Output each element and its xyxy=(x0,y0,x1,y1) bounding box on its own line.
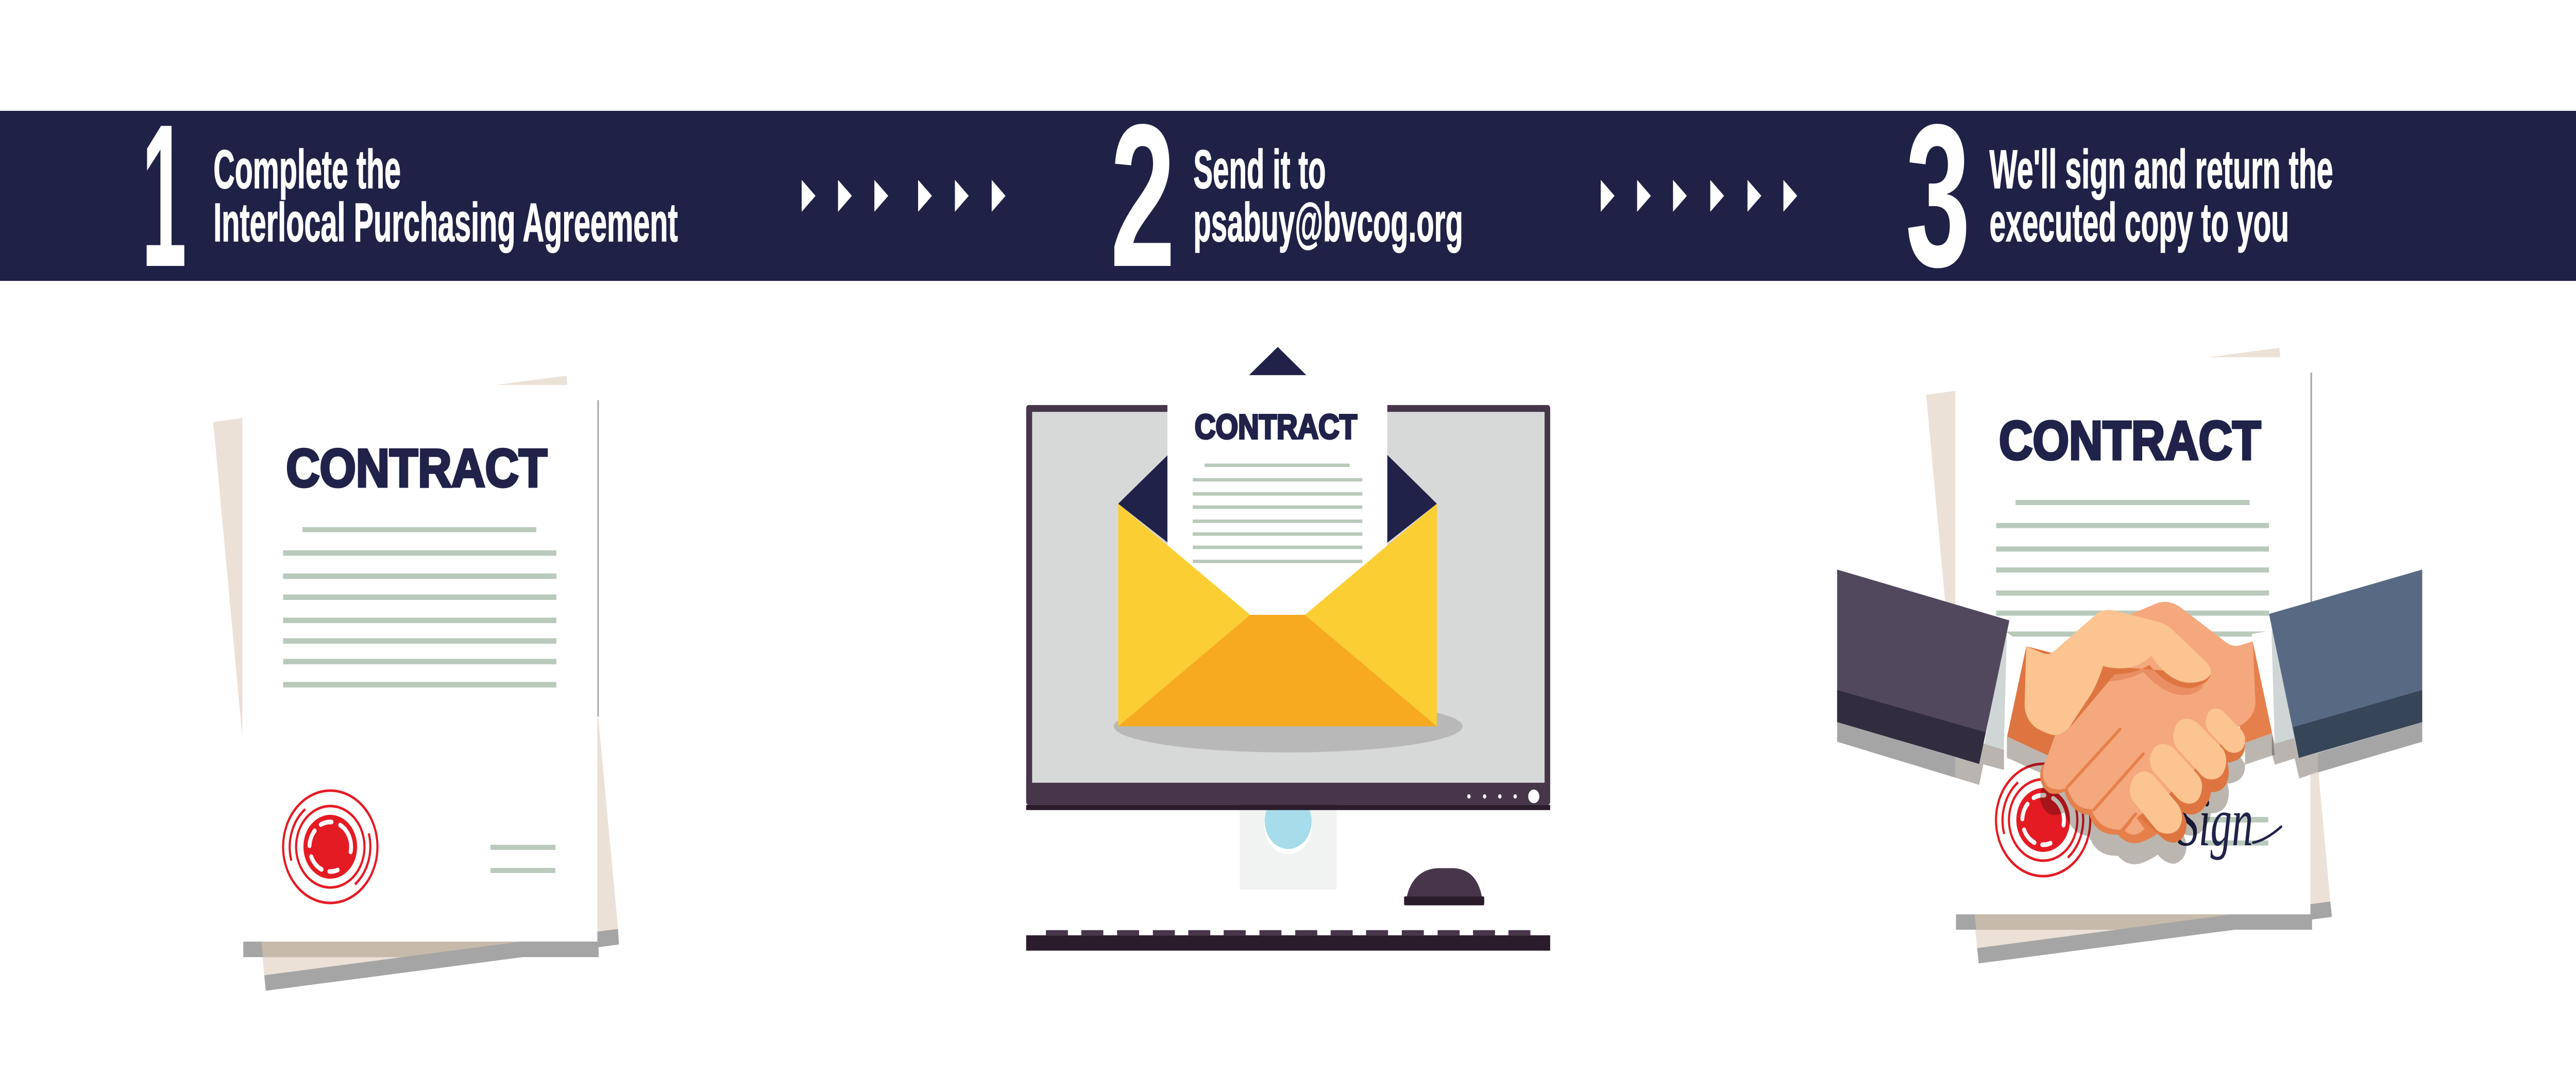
panel: signed contract with handshake xyxy=(1837,348,2422,963)
step 1 text: Complete the xyxy=(213,139,401,200)
right sleeve xyxy=(2269,569,2422,758)
contract heading: CONTRACT xyxy=(1999,410,2261,471)
panel: steps banner: 1 xyxy=(142,82,187,309)
step 2 number: 2 xyxy=(1110,82,1175,309)
monitor stand xyxy=(1240,793,1336,890)
handshake shadow xyxy=(2007,717,2275,864)
monitor frame xyxy=(1026,405,1550,810)
envelope with contract xyxy=(1114,347,1463,752)
monitor and peripherals xyxy=(1026,347,1550,951)
sleeve shadows xyxy=(1837,722,2422,785)
step 3 number: 3 xyxy=(1906,82,1971,309)
contract heading: CONTRACT xyxy=(286,439,547,498)
arrows: step 2 to step 3 xyxy=(1601,180,1797,212)
left sleeve xyxy=(1837,569,2009,764)
step 3 text: We'll sign and return the xyxy=(1990,139,2333,200)
signed contract paper stack xyxy=(1926,348,2332,963)
icon: red seal xyxy=(1996,764,2090,876)
keyboard xyxy=(1026,930,1550,951)
panel: contract document xyxy=(213,376,619,991)
step 2 text: Send it to xyxy=(1193,139,1326,200)
step 1 text: Interlocal Purchasing Agreement xyxy=(213,192,678,253)
contract paper stack xyxy=(213,376,619,991)
panel: email on monitor xyxy=(1026,347,1550,951)
shirt cuffs xyxy=(1985,630,2294,750)
step 3 text xyxy=(1990,139,2333,253)
step 2 text xyxy=(1193,139,1463,253)
signature: Sign xyxy=(2177,783,2253,860)
step 3 text: executed copy to you xyxy=(1990,192,2289,253)
step 2 text: psabuy@bvcog.org xyxy=(1193,192,1463,253)
icon: handshake xyxy=(2007,602,2272,843)
icon: computer mouse xyxy=(1404,868,1484,906)
icon: red seal xyxy=(283,791,378,903)
contract heading on letter: CONTRACT xyxy=(1195,408,1357,446)
panel: steps banner xyxy=(0,82,2576,309)
step 1 text xyxy=(213,139,678,253)
arrows: step 1 to step 2 xyxy=(802,180,1006,212)
